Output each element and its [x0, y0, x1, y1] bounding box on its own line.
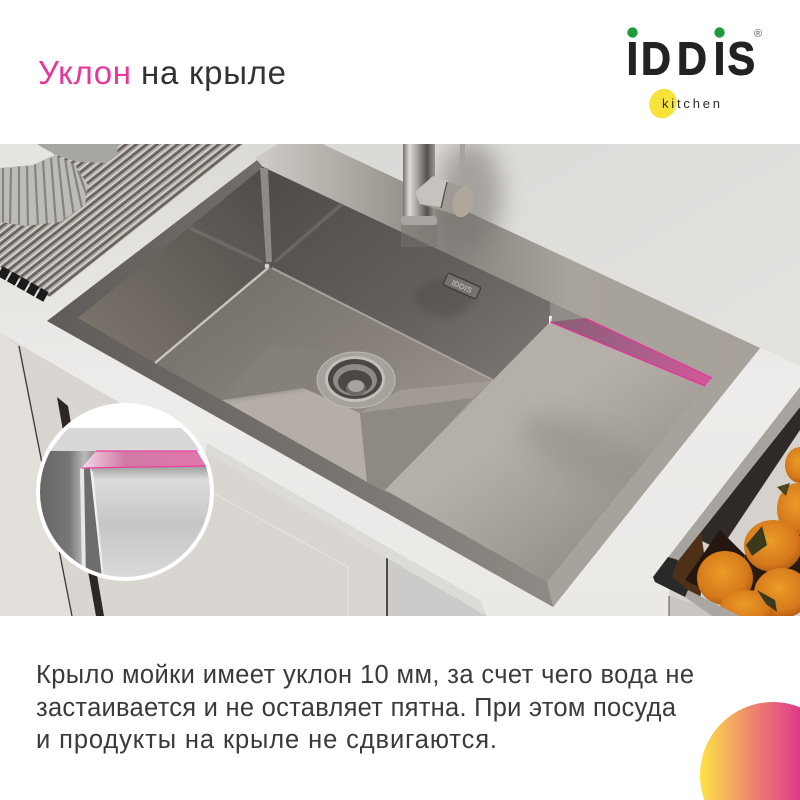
- bowl floor: [156, 267, 492, 428]
- bin dark inner wall: [673, 407, 800, 567]
- drain strainer: [317, 352, 395, 408]
- inset right sheet: [82, 466, 213, 581]
- bowl back corner highlights: [190, 168, 342, 262]
- title: [38, 54, 286, 91]
- logo: kitchen label: kitchen: [662, 96, 720, 111]
- bowl corner weld lines: [155, 264, 493, 380]
- persimmons: [697, 447, 800, 626]
- title: на крыле: [141, 54, 286, 91]
- counter surface: [0, 237, 800, 560]
- stacked bowl, upper: [37, 144, 118, 163]
- logo: iddis kitchen: [627, 27, 762, 123]
- logo: wordmark: IDDIS: [627, 34, 755, 85]
- faucet: [401, 144, 476, 247]
- counter front edge bevel: [205, 443, 487, 616]
- faucet shadow on wall: [438, 140, 502, 250]
- overflow reflection: [418, 282, 471, 316]
- fruit bin: [653, 387, 800, 626]
- sink rim: [47, 144, 760, 607]
- body text: [36, 661, 694, 754]
- pink slope marker: [550, 318, 712, 386]
- bin rim: [656, 387, 800, 573]
- inset circle: slope close-up: [37, 403, 213, 581]
- logo: wordmark: ®: [754, 28, 762, 40]
- bin reflection: [672, 532, 704, 596]
- stacked bowl, lower: [0, 144, 88, 226]
- rim right strip: [547, 348, 760, 607]
- body text: Крыло мойки имеет уклон 10 мм, за счет чего вода не: [36, 661, 694, 689]
- drainboard wing: [385, 319, 712, 582]
- inset pink band: [82, 451, 206, 468]
- body text: и продукты на крыле не сдвигаются.: [36, 726, 497, 754]
- rim back strip: [255, 144, 760, 378]
- overflow badge: IDDIS: [450, 278, 474, 295]
- photo: sink on counter: [0, 140, 800, 626]
- inset weld: [80, 468, 104, 578]
- inset left sheet: [40, 451, 96, 566]
- floor facets: [222, 382, 491, 492]
- logo: yellow blob: [644, 84, 682, 123]
- wing edge highlight: [549, 316, 552, 324]
- body text: застаивается и не оставляет пятна. При этом посуда: [36, 694, 677, 722]
- wall surface: [322, 144, 800, 366]
- wing shading band: [524, 414, 623, 474]
- bowl back wall: [263, 167, 550, 380]
- drying rack: [0, 144, 250, 304]
- gradient corner circle: [700, 702, 800, 800]
- title: Уклон: [38, 54, 131, 91]
- bowl left wall: [78, 167, 270, 363]
- cabinets: [0, 333, 487, 616]
- overflow badge: [443, 273, 481, 299]
